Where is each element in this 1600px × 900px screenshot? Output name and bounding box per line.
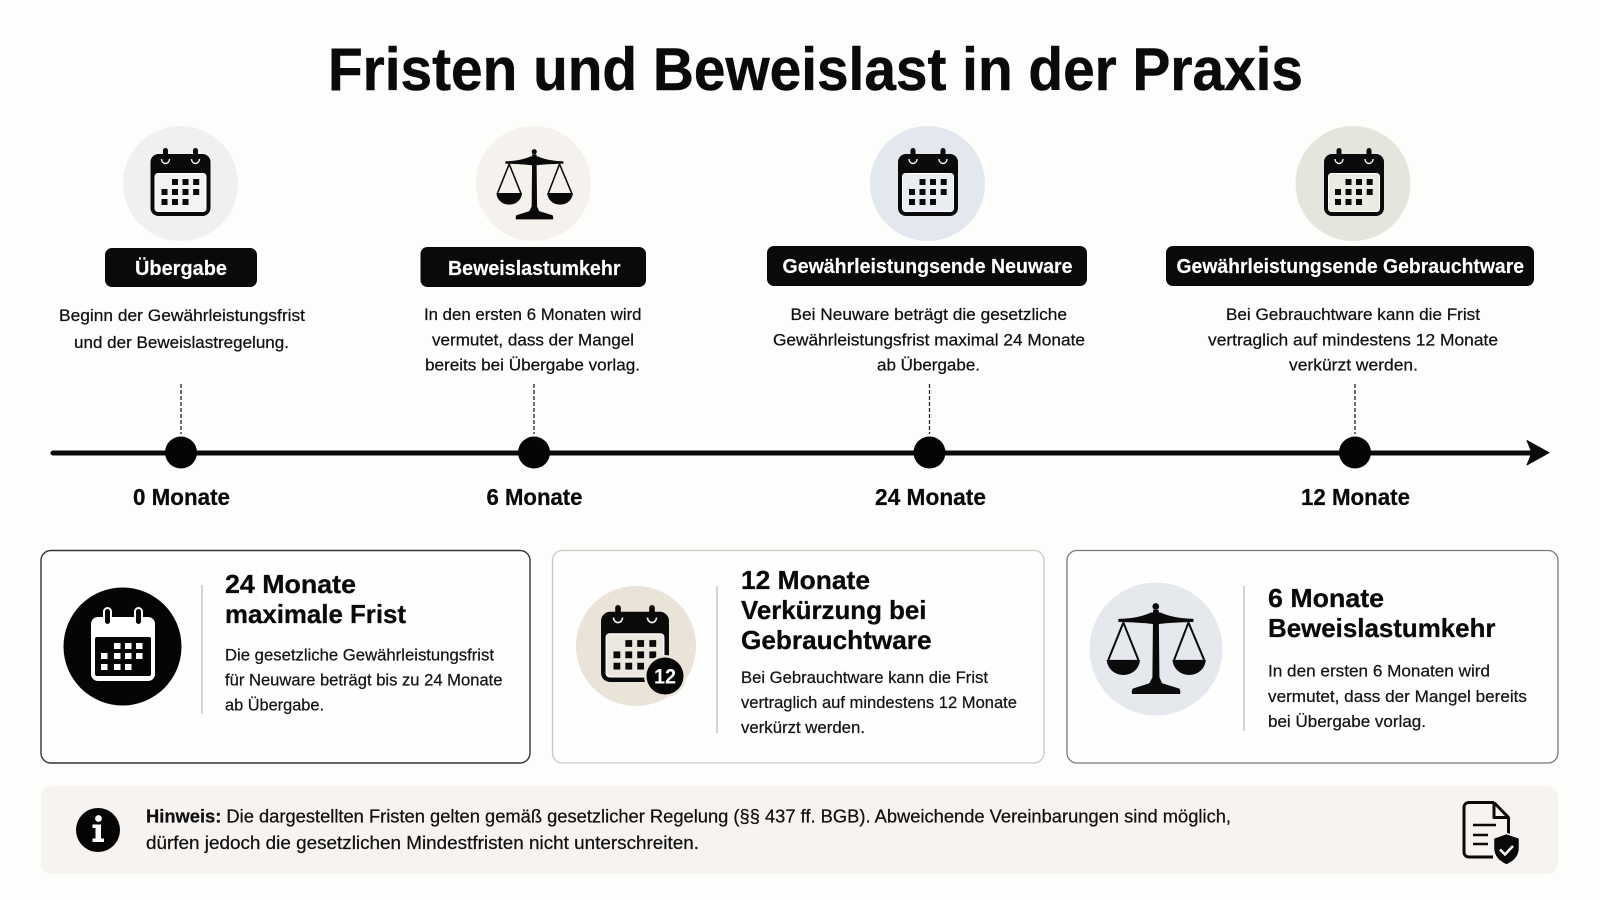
card heading	[225, 569, 406, 629]
icon: info	[76, 808, 120, 852]
card frame	[1067, 550, 1558, 763]
milestone: Beweislastumkehr	[420, 126, 646, 374]
card text: vermutet, dass der Mangel bereits	[1268, 687, 1527, 706]
card heading: maximale Frist	[225, 599, 406, 629]
timeline	[53, 384, 1549, 510]
icon: calendar on sage circle	[1296, 126, 1410, 241]
timeline labels: 0 Monate	[133, 484, 230, 510]
description: verkürzt werden.	[1289, 356, 1418, 374]
card frame	[41, 550, 530, 763]
card text: In den ersten 6 Monaten wird	[1268, 662, 1490, 680]
card heading: Beweislastumkehr	[1268, 613, 1496, 643]
card heading: 12 Monate	[741, 565, 870, 595]
description	[424, 305, 642, 374]
card heading: 24 Monate	[225, 569, 356, 599]
note background	[41, 786, 1558, 874]
panel: 12 Monate Verkürzung bei Gebrauchtware	[552, 550, 1044, 763]
description	[1208, 305, 1498, 374]
icon: calendar on blue circle	[870, 126, 985, 241]
card heading	[741, 565, 932, 655]
timeline axis with arrow	[53, 440, 1549, 465]
title: Fristen und Beweislast in der Praxis	[328, 36, 1303, 103]
card text: vertraglich auf mindestens 12 Monate	[741, 693, 1017, 712]
card text: ab Übergabe.	[225, 696, 324, 714]
icon: document with shield	[1464, 802, 1520, 865]
card frame	[552, 550, 1044, 763]
milestone: Übergabe	[59, 126, 305, 352]
panel: 24 Monate maximale Frist	[41, 550, 530, 763]
card text	[1268, 662, 1527, 731]
label pill: Beweislastumkehr	[448, 258, 621, 280]
card heading: Verkürzung bei	[741, 595, 926, 625]
divider	[716, 586, 718, 733]
icon: calendar with 12 badge	[576, 586, 696, 706]
icon: calendar on grey circle	[123, 126, 238, 241]
description	[59, 306, 305, 352]
note text	[146, 806, 1231, 853]
timeline labels: 12 Monate	[1301, 484, 1410, 510]
description: ab Übergabe.	[877, 356, 980, 374]
label pill	[420, 247, 646, 287]
timeline markers	[165, 436, 1371, 468]
card text: bei Übergabe vorlag.	[1268, 712, 1426, 731]
description	[773, 305, 1085, 374]
description: Beginn der Gewährleistungsfrist	[59, 306, 305, 325]
label pill	[105, 248, 257, 287]
description: vertraglich auf mindestens 12 Monate	[1208, 330, 1498, 350]
label pill	[1166, 246, 1534, 286]
description: Gewährleistungsfrist maximal 24 Monate	[773, 330, 1085, 350]
description: und der Beweislastregelung.	[74, 333, 289, 352]
label pill: Gewährleistungsende Neuware	[782, 256, 1072, 278]
note text: Hinweis: Die dargestellten Fristen gelten gemäß gesetzlicher Regelung (§§ 437 ff. BGB). Abweichende Vereinbarungen sind möglich,	[146, 806, 1231, 826]
connector lines	[181, 384, 1355, 434]
card text: für Neuware beträgt bis zu 24 Monate	[225, 670, 502, 690]
card heading: Gebrauchtware	[741, 625, 932, 655]
card text: verkürzt werden.	[741, 718, 865, 737]
note bar	[41, 786, 1558, 874]
timeline labels	[133, 484, 1410, 510]
description: bereits bei Übergabe vorlag.	[425, 356, 640, 374]
timeline labels: 24 Monate	[875, 484, 986, 510]
timeline labels: 6 Monate	[486, 484, 582, 510]
icon: calendar with 12 badge: 12	[654, 666, 676, 688]
note text: dürfen jedoch die gesetzlichen Mindestfristen nicht unterschreiten.	[146, 833, 699, 853]
divider	[1243, 586, 1245, 731]
milestone: Gewährleistungsende Neuware	[767, 126, 1087, 374]
card text	[225, 646, 502, 714]
divider	[201, 585, 203, 714]
label pill: Gewährleistungsende Gebrauchtware	[1176, 256, 1524, 278]
card text: Die gesetzliche Gewährleistungsfrist	[225, 646, 494, 664]
icon: scales on cream circle	[476, 126, 591, 241]
description: Bei Neuware beträgt die gesetzliche	[790, 305, 1067, 324]
description: In den ersten 6 Monaten wird	[424, 305, 642, 324]
milestone: Gewährleistungsende Gebrauchtware	[1166, 126, 1534, 374]
card heading	[1268, 583, 1496, 643]
label pill	[767, 246, 1087, 286]
description: vermutet, dass der Mangel	[432, 330, 634, 350]
panel: 6 Monate Beweislastumkehr	[1067, 550, 1558, 763]
card text: Bei Gebrauchtware kann die Frist	[741, 668, 988, 687]
icon: calendar on black circle	[64, 588, 182, 706]
label pill: Übergabe	[135, 257, 227, 280]
description: Bei Gebrauchtware kann die Frist	[1226, 305, 1480, 324]
card heading: 6 Monate	[1268, 583, 1384, 613]
icon: scales on blue circle	[1090, 582, 1222, 716]
card text	[741, 668, 1017, 737]
